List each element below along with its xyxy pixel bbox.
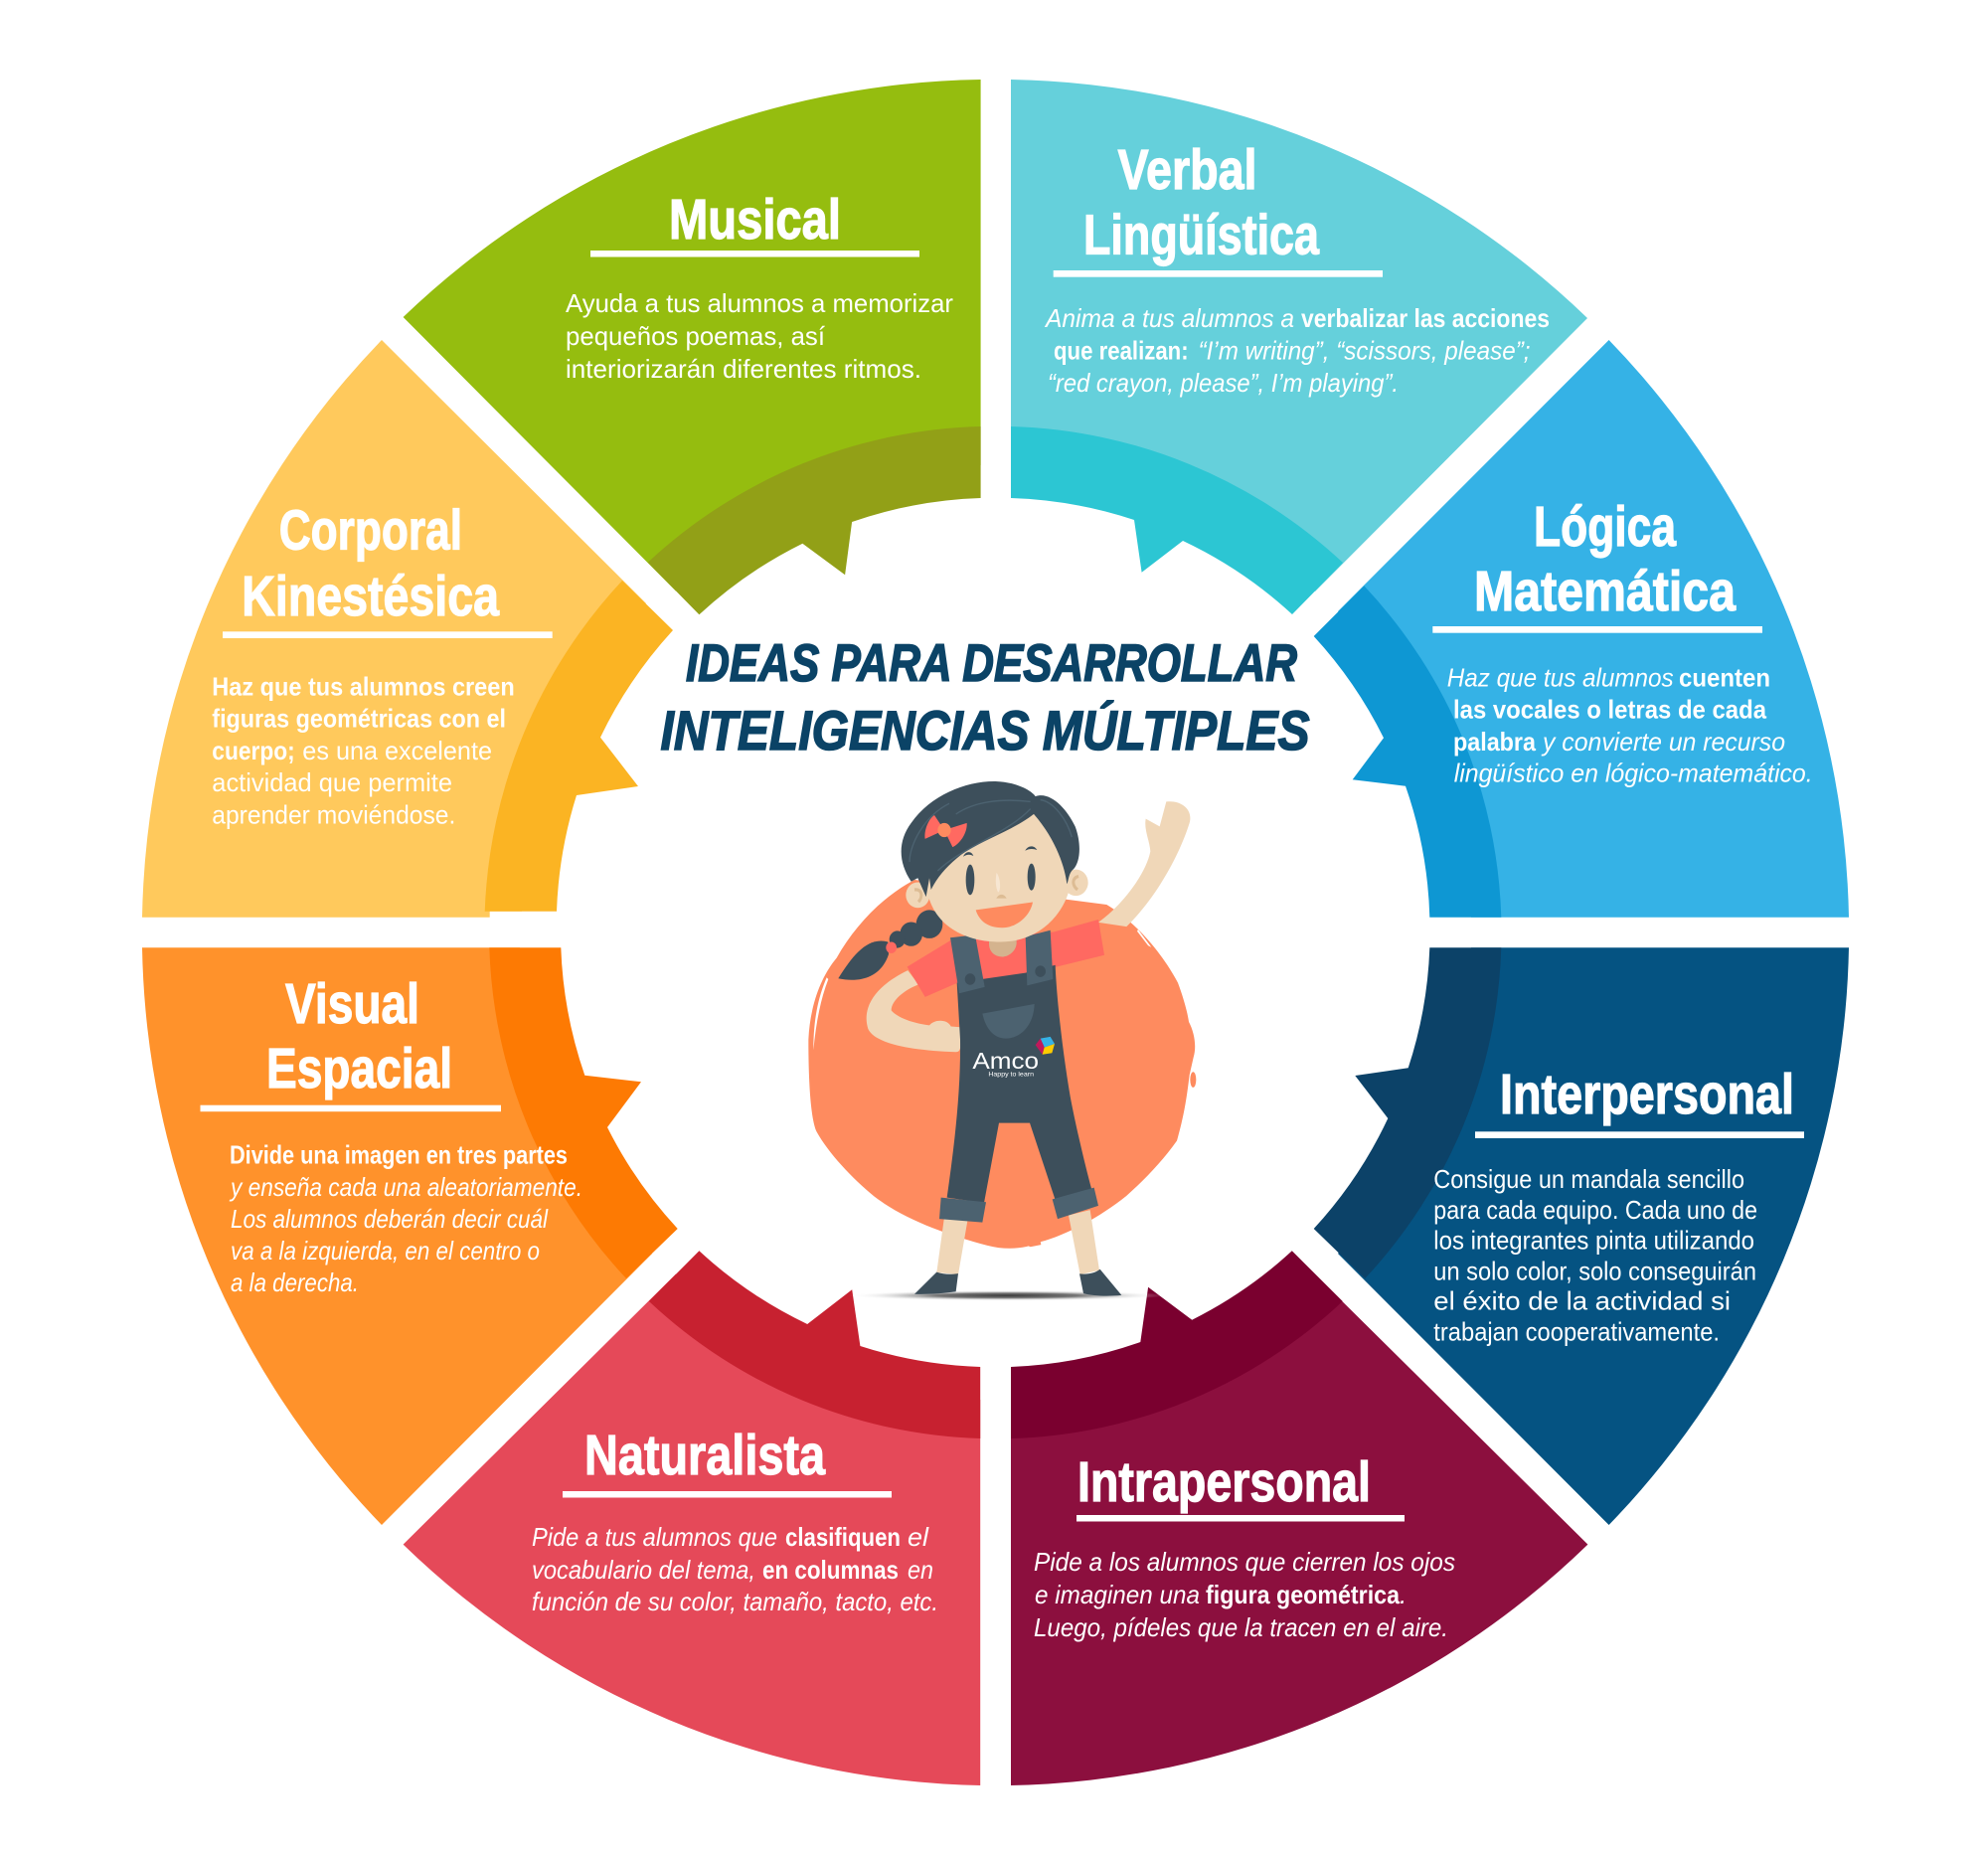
text block: Visual: y enseña cada una aleatoriamente.: [229, 1172, 582, 1202]
heading rule: [1054, 270, 1383, 277]
heading: Lógica Matemática: Lógica: [1534, 495, 1677, 559]
text block: Naturalista: el: [908, 1522, 929, 1552]
text block: Visual: Los alumnos deberán decir cuál: [231, 1204, 549, 1234]
text block: Intrapersonal: figura geométrica: [1206, 1580, 1400, 1609]
text block: Verbal: verbalizar las acciones: [1301, 303, 1550, 333]
panel: Visual Espacial: [142, 947, 678, 1525]
straps and buttons: [950, 930, 1053, 993]
text block: Visual: Divide una imagen en tres partes: [230, 1140, 568, 1170]
text block: Naturalista: en columnas: [762, 1555, 899, 1585]
text block: Intrapersonal: Pide a los alumnos que cierren los ojos: [1034, 1547, 1455, 1577]
band: Intrapersonal inner arc with pointer: [1011, 1251, 1343, 1438]
hair strands: [910, 800, 1072, 871]
ears: [906, 870, 1088, 908]
heading: Intrapersonal: Intrapersonal: [1077, 1450, 1371, 1514]
text block: Intrapersonal: Luego, pídeles que la tracen en el aire.: [1034, 1612, 1448, 1642]
heading rule: [223, 631, 553, 638]
pocket: [982, 1004, 1035, 1039]
neck: [989, 938, 1017, 956]
heading rule: [1432, 626, 1762, 633]
heading: Corporal Kinestésica: Kinestésica: [242, 565, 500, 628]
logo: [972, 1037, 1055, 1079]
text block: Visual: a la derecha.: [231, 1267, 359, 1297]
bent arm: [867, 970, 960, 1052]
hair: [902, 781, 1079, 897]
text block: Verbal: Anima a tus alumnos a: [1044, 303, 1294, 333]
band: Lógica inner arc with pointer: [1314, 586, 1501, 918]
text block: Naturalista: en: [908, 1555, 933, 1585]
text block: Corporal: Haz que tus alumnos creen: [212, 671, 515, 701]
text block: Verbal: “red crayon, please”, I’m playing”.: [1048, 368, 1399, 398]
text block: Naturalista: vocabulario del tema,: [532, 1555, 755, 1585]
text block: Musical: Ayuda a tus alumnos a memorizar: [566, 288, 953, 318]
text block: Verbal: “I’m writing”, “scissors, please”;: [1199, 336, 1531, 366]
text block: Naturalista: función de su color, tamaño, tacto, etc.: [532, 1587, 938, 1616]
band: Corporal inner arc with pointer: [485, 581, 673, 912]
panel: Interpersonal: [1314, 947, 1849, 1525]
cuffs: [939, 1188, 1098, 1223]
heading: Corporal Kinestésica: [242, 499, 500, 628]
title: INTELIGENCIAS MÚLTIPLES: [660, 699, 1310, 761]
band: Verbal inner arc with pointer: [1011, 426, 1343, 614]
text block: Musical: [566, 288, 953, 384]
illustration: girl character: [808, 781, 1196, 1301]
text block: Verbal: que realizan:: [1054, 336, 1189, 366]
text block: Corporal: actividad que permite: [212, 767, 452, 797]
text block: Intrapersonal: e imaginen una: [1035, 1580, 1200, 1609]
panel: Corporal Kinestésica: [142, 340, 673, 918]
text block: Musical: pequeños poemas, así: [566, 321, 826, 351]
heading: Naturalista: Naturalista: [584, 1424, 826, 1487]
heading: Visual Espacial: Visual: [285, 972, 419, 1036]
text block: Verbal: [1044, 303, 1550, 398]
heading: Verbal Lingüística: Verbal: [1117, 138, 1256, 202]
text block: Corporal: figuras geométricas con el: [212, 704, 506, 734]
text block: Lógica: las vocales o letras de cada: [1453, 695, 1766, 725]
panel: Musical: [404, 80, 981, 614]
eyes and brows: [963, 846, 1037, 895]
heading rule: [1475, 1131, 1804, 1138]
panel: Lógica Matemática: [1314, 340, 1849, 918]
text block: Corporal: aprender moviéndose.: [212, 799, 455, 829]
ground shadow: [848, 1290, 1166, 1301]
paint scratches: [813, 929, 1196, 1247]
heading: Lógica Matemática: [1474, 495, 1737, 623]
heading rule: [563, 1491, 892, 1497]
band: Musical inner arc with pointer: [648, 426, 981, 614]
legs: [936, 1210, 1099, 1274]
heading rule: [590, 251, 919, 256]
heading: Lógica Matemática: Matemática: [1474, 560, 1737, 623]
text block: Naturalista: [532, 1522, 938, 1616]
text block: Interpersonal: el éxito de la actividad si: [1433, 1286, 1731, 1316]
text block: Corporal: cuerpo;: [212, 736, 295, 765]
text block: Musical: interiorizarán diferentes ritmos.: [566, 354, 921, 384]
band: Naturalista inner arc with pointer: [649, 1251, 980, 1438]
text block: Interpersonal: un solo color, solo conseguirán: [1433, 1256, 1756, 1285]
text block: Naturalista: Pide a tus alumnos que: [532, 1522, 777, 1552]
heading: Verbal Lingüística: [1083, 138, 1320, 267]
hair bow: [924, 815, 967, 847]
text block: Lógica: lingüístico en lógico-matemático.: [1454, 759, 1813, 788]
title: IDEAS PARA DESARROLLAR: [686, 634, 1297, 693]
heading: Visual Espacial: Espacial: [266, 1037, 452, 1100]
shoes: [914, 1269, 1121, 1296]
text block: Naturalista: clasifiquen: [785, 1522, 901, 1552]
logo: Happy to learn: [988, 1071, 1035, 1079]
shirt: [908, 920, 1104, 997]
heading: Verbal Lingüística: Lingüística: [1083, 204, 1320, 267]
heading: Interpersonal: Interpersonal: [1500, 1063, 1794, 1126]
text block: Interpersonal: para cada equipo. Cada uno de: [1433, 1195, 1757, 1225]
text block: Intrapersonal: [1034, 1547, 1455, 1642]
mouth: [976, 902, 1033, 928]
text block: Interpersonal: trabajan cooperativamente.: [1433, 1316, 1720, 1346]
heading rule: [201, 1105, 501, 1111]
orange paint blob: [808, 880, 1195, 1249]
panel: Naturalista: [404, 1251, 980, 1785]
face: [926, 809, 1072, 941]
text block: Visual: [229, 1140, 582, 1297]
nose: [996, 873, 1007, 899]
braid: [838, 910, 942, 980]
text block: Lógica: Haz que tus alumnos: [1447, 663, 1674, 693]
text block: Corporal: es una excelente: [302, 736, 492, 765]
panel: Intrapersonal: [1011, 1251, 1587, 1785]
text block: Interpersonal: Consigue un mandala sencillo: [1433, 1164, 1744, 1194]
text block: Corporal: [212, 671, 515, 829]
heading rule: [1077, 1515, 1405, 1521]
overalls: [947, 965, 1091, 1203]
logo: Amco: [972, 1047, 1039, 1074]
heading: Musical: Musical: [669, 188, 841, 252]
panel: Verbal Lingüística: [1011, 80, 1587, 614]
text block: Interpersonal: [1433, 1164, 1757, 1346]
text block: Interpersonal: los integrantes pinta utilizando: [1433, 1226, 1754, 1256]
band: Visual inner arc with pointer: [489, 947, 678, 1278]
text block: Lógica: cuenten: [1679, 663, 1770, 693]
text block: Visual: va a la izquierda, en el centro o: [231, 1236, 540, 1265]
raised arm: [1098, 801, 1190, 927]
text block: Intrapersonal: .: [1400, 1580, 1407, 1609]
text block: Lógica: [1447, 663, 1813, 788]
band: Interpersonal inner arc with pointer: [1314, 947, 1501, 1278]
heading: Corporal Kinestésica: Corporal: [279, 499, 462, 563]
text block: Lógica: palabra: [1453, 727, 1536, 757]
title: [660, 634, 1310, 761]
heading: Visual Espacial: [266, 972, 452, 1100]
text block: Lógica: y convierte un recurso: [1541, 727, 1785, 757]
